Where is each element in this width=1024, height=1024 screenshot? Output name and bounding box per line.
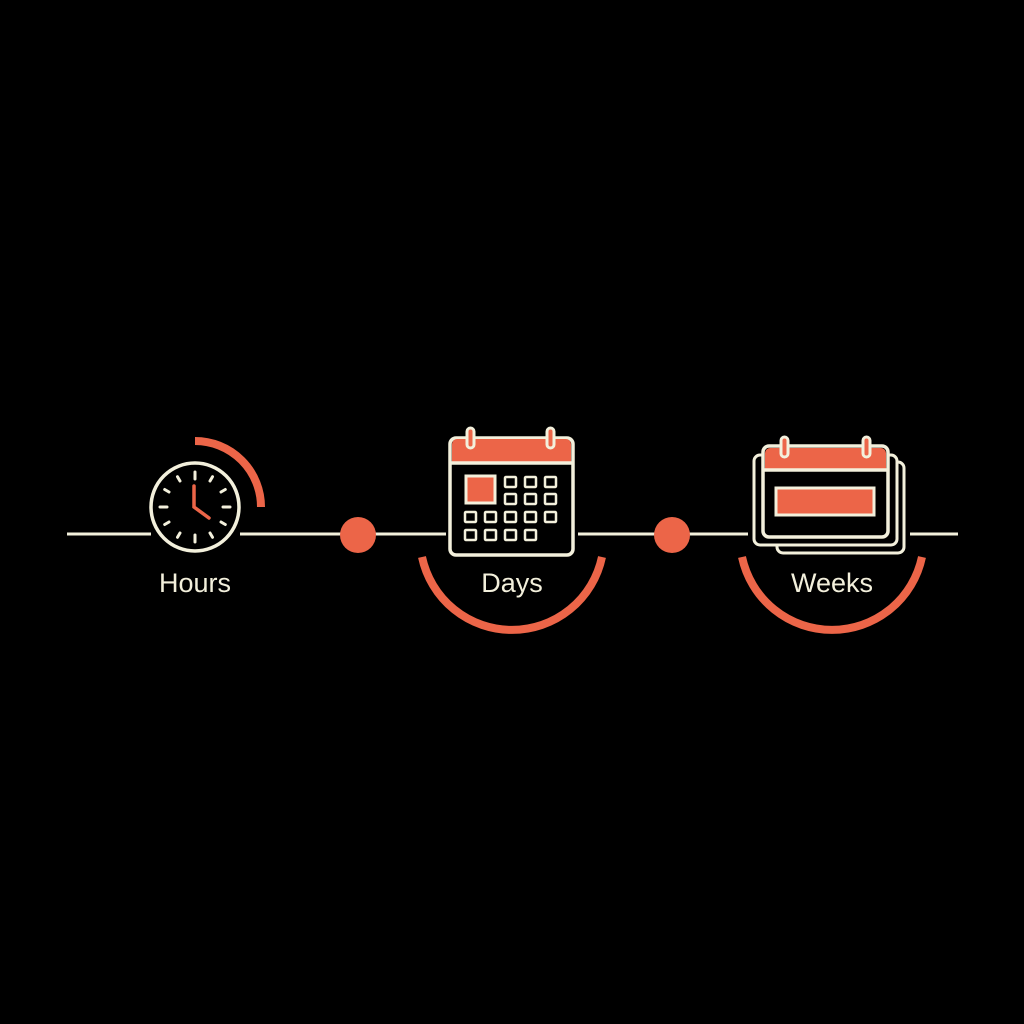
icon: clock bbox=[151, 441, 261, 551]
label: weeks: Weeks bbox=[791, 568, 873, 598]
dot 2 bbox=[654, 517, 690, 553]
label: days: Days bbox=[481, 568, 543, 598]
arc: weeks bbox=[742, 557, 922, 630]
arc: hours bbox=[195, 441, 261, 507]
label: hours: Hours bbox=[159, 568, 231, 598]
timeline line bbox=[67, 532, 958, 536]
icon: calendar weeks bbox=[754, 437, 904, 553]
dot 1 bbox=[340, 517, 376, 553]
arc: days bbox=[422, 557, 602, 630]
icon: calendar days bbox=[450, 428, 573, 555]
